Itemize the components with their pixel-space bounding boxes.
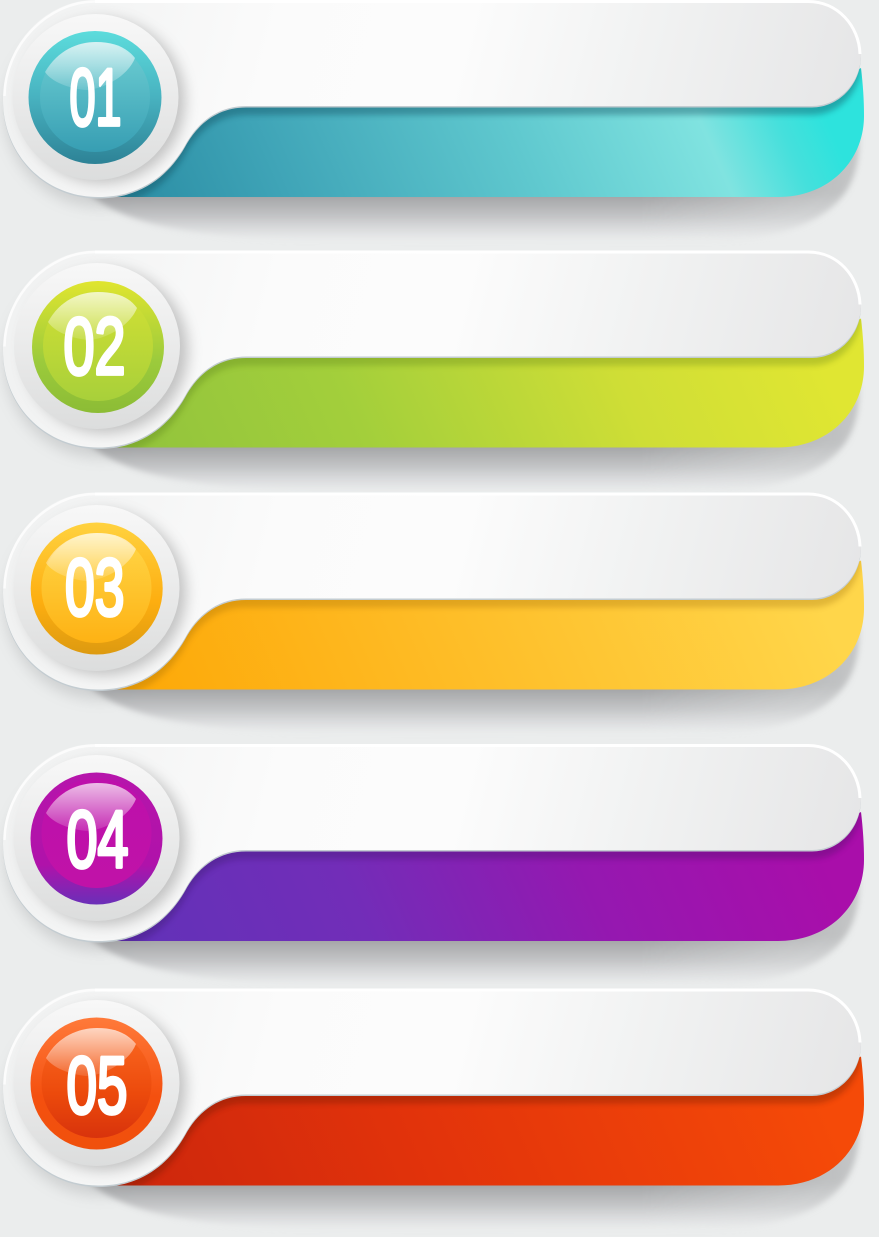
panel shape 04 [3,744,864,986]
number badge 05 [14,1000,186,1170]
gloss highlight [45,42,135,90]
panel shape 01 [3,0,864,242]
number: 01 [70,53,122,143]
gloss highlight [46,533,136,581]
banner 02: green [3,250,864,492]
number: 05 [66,1041,128,1131]
panel shape 02 [3,250,864,492]
gloss highlight [48,292,137,340]
number: 04 [66,795,128,885]
banner 01: teal [3,0,864,242]
gloss highlight [46,783,136,831]
panel shape 05 [3,988,864,1230]
number: 03 [65,543,124,633]
number badge 04 [14,755,186,925]
panel shape 03 [3,492,864,734]
gloss highlight [46,1028,136,1076]
banner 04: purple [3,744,864,986]
number badge 01 [12,14,185,183]
number badge 03 [14,505,186,675]
number badge 02 [14,263,188,433]
banner 03: amber [3,492,864,734]
banner 05: red [3,988,864,1230]
number: 02 [64,302,126,392]
